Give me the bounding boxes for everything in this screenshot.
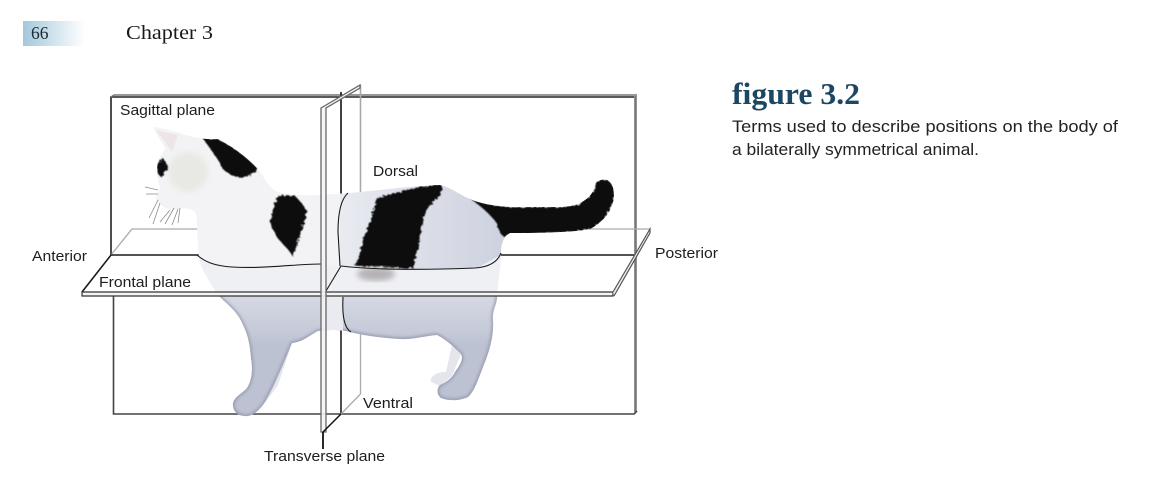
whiskers: [145, 187, 180, 225]
cat photo: [153, 127, 614, 416]
transverse plane front plate: [321, 85, 360, 449]
frontal band: [352, 255, 501, 269]
cat body base: [140, 120, 630, 420]
page number tab: 66: [31, 23, 49, 43]
label: ventral: Ventral: [363, 396, 413, 412]
ear tint: [156, 130, 178, 152]
label: posterior: Posterior: [655, 246, 718, 262]
frontal plane front edge: [82, 229, 650, 296]
label: anterior: Anterior: [32, 249, 87, 265]
figure caption: [732, 118, 1118, 159]
figure title: figure 3.2: [732, 76, 860, 111]
figure caption: Terms used to describe positions on the body of: [732, 118, 1118, 136]
anatomical plane diagram: [32, 85, 718, 465]
rump shading: [340, 185, 505, 269]
cheek shade: [168, 152, 208, 192]
transverse plane back edges: [341, 85, 360, 414]
figure caption: a bilaterally symmetrical animal.: [732, 141, 979, 159]
label: dorsal: Dorsal: [373, 164, 418, 180]
transverse slice: [326, 296, 343, 330]
chapter heading: Chapter 3: [126, 22, 213, 44]
black markings: [157, 138, 614, 268]
label: frontal plane: Frontal plane: [99, 275, 191, 291]
sagittal plane: [111, 95, 637, 414]
label: sagittal plane: Sagittal plane: [120, 103, 215, 119]
lower body edge shading: [220, 296, 497, 416]
lower body: [220, 296, 497, 416]
label: transverse plane: Transverse plane: [264, 449, 385, 465]
page number tab: [23, 21, 85, 46]
belly smudge: [357, 267, 395, 281]
far-side cat legs: [265, 340, 461, 403]
plane cut lines on cat: [197, 193, 501, 332]
frontal plane back edges: [82, 229, 650, 292]
